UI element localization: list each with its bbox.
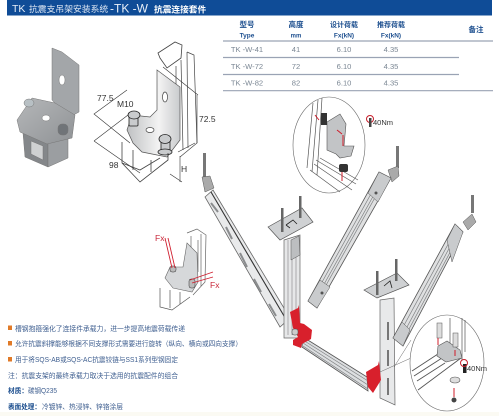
right diagonal brace [393,195,476,346]
table header: 型号 [240,19,255,29]
centre post with plate [268,196,313,338]
table header [240,19,484,40]
table header: 设计荷载 [330,20,358,29]
detail circle: top connection [293,97,365,193]
surface treatment: 冷镀锌、热浸锌、锌铬涂层 [42,402,123,411]
lower channel [122,142,168,182]
Fx labels: Fx [210,280,220,290]
red connector: centre [290,305,312,348]
torque label: lower: 40Nm [467,364,487,373]
table rows: 4.35 [384,62,398,71]
table rows [231,45,398,88]
dimension labels: H [181,164,187,174]
dimension labels: M10 [117,99,134,109]
surface treatment [8,402,123,411]
surface treatment: 表面处理： [8,402,41,411]
table rows: 4.35 [384,78,398,88]
material: 材质： [8,386,28,395]
table rows: 4.35 [384,45,398,54]
table header: mm [291,34,301,40]
note: 注：抗震支架的最终承载力取决于选用的抗震配件的组合 [8,371,178,380]
dimensioned bracket drawing [94,42,216,182]
feature list [8,324,242,411]
bullet 2: 允许抗震斜撑能够根据不同支撑形式需要进行旋转（纵向、横向或四向支撑） [15,339,242,348]
table rows: 72 [292,62,300,71]
material [8,386,57,395]
dimension lines [94,67,198,182]
table rows: 82 [292,78,300,88]
table header: 备注 [468,24,484,34]
Fx labels [155,233,220,290]
detail circle: lower connection [410,315,484,411]
load direction diagram [155,229,220,310]
table rows: 41 [292,45,300,54]
title banner: 抗震连接套件 [154,4,206,14]
table header: 高度 [288,19,304,29]
table rows: 6.10 [337,78,351,88]
table rows: TK -W-72 [231,62,263,71]
bracket plate [127,70,180,157]
left diagonal brace [202,153,290,327]
lower horizontal brace [302,337,368,391]
spec table [223,19,493,91]
product photo: bracket [17,48,79,167]
dimension labels [97,93,216,174]
table rows: TK -W-82 [231,78,263,88]
torque label: top: 40Nm [373,118,393,127]
bolts [128,111,172,155]
title banner [7,0,492,16]
table rows: 6.10 [337,45,351,54]
material: 碳钢Q235 [28,386,57,395]
title banner: 抗震支吊架安装系统 [29,3,108,14]
title banner: -TK -W [110,2,149,16]
dimension labels: 98 [109,160,119,170]
dimension labels: 72.5 [199,114,216,124]
upper right brace [308,146,399,308]
table rows: 6.10 [337,62,351,71]
table header: 推荐荷载 [377,20,405,29]
table header: Type [240,32,255,40]
red connector: right [366,361,381,393]
right post with plate [364,259,409,405]
Fx labels: Fx [155,233,165,243]
channel [158,42,182,68]
table header: Fx(kN) [381,32,401,40]
dimension labels: 77.5 [97,93,114,103]
title banner: TK [12,3,25,15]
bullet 3: 用于将SQS-AB或SQS-AC抗震铰链与SS1系列型钢固定 [15,355,178,364]
torque label: top [366,116,393,127]
leader lines to detail circle [380,340,411,372]
bullet 1: 槽钢抱箍强化了连接件承载力，进一步提高地震荷载传递 [15,324,185,333]
table header: Fx(kN) [334,32,354,40]
table rows: TK -W-41 [231,45,263,54]
